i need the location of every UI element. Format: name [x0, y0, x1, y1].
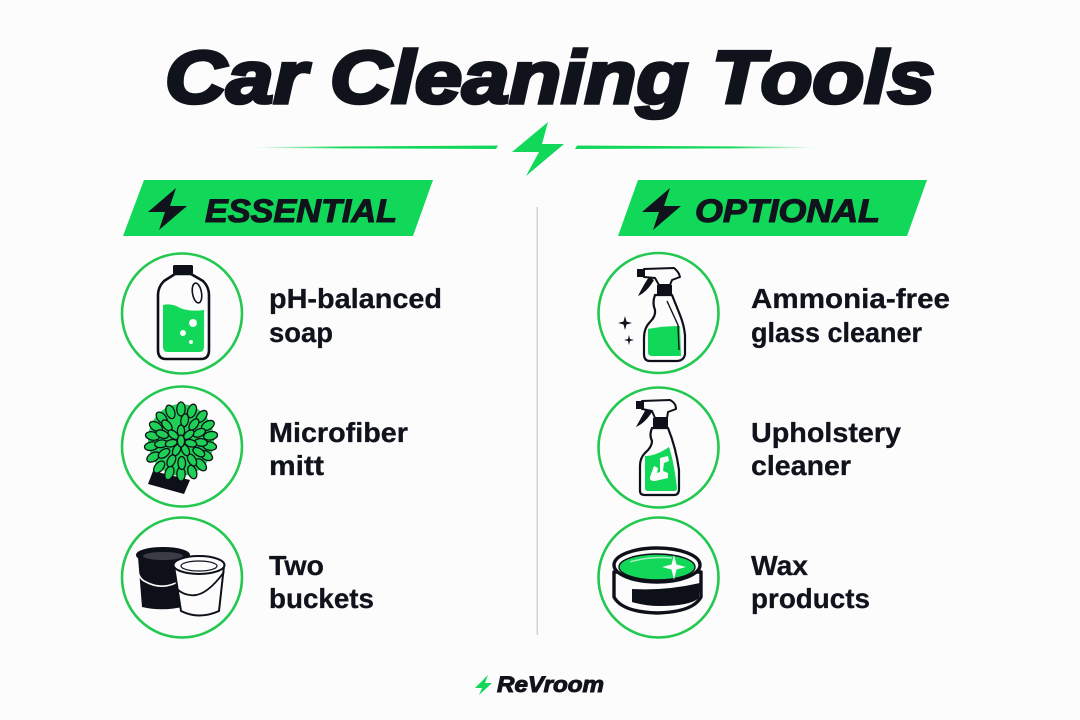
item: wax products — [598, 518, 870, 638]
item: two buckets — [122, 518, 374, 638]
item: microfiber mitt: mitt — [269, 450, 324, 481]
item: two buckets: buckets — [269, 583, 374, 614]
item: microfiber mitt: Microfiber — [269, 417, 408, 448]
item: pH-balanced soap — [122, 254, 442, 374]
essential heading badge — [123, 180, 433, 236]
item: ammonia-free glass cleaner — [598, 253, 950, 373]
item: wax products: products — [751, 583, 870, 614]
optional heading badge: OPTIONAL — [695, 193, 880, 229]
brand logo: ReVroom — [497, 672, 604, 697]
item: microfiber mitt — [122, 386, 408, 506]
item: pH-balanced soap: soap — [269, 317, 333, 348]
item: pH-balanced soap: pH-balanced — [269, 283, 442, 314]
title divider with bolt — [255, 122, 816, 176]
item: two buckets: Two — [269, 550, 324, 581]
title: Car Cleaning Tools — [165, 36, 935, 119]
panel: essential — [122, 180, 442, 638]
panel: optional — [598, 180, 950, 638]
item: upholstery cleaner — [598, 388, 901, 508]
item: upholstery cleaner: Upholstery — [751, 417, 901, 448]
item: wax products: Wax — [751, 550, 808, 581]
item: ammonia-free glass cleaner: Ammonia-free — [751, 283, 950, 314]
item: ammonia-free glass cleaner: glass cleaner — [751, 317, 922, 348]
vertical divider — [536, 207, 538, 635]
item: upholstery cleaner: cleaner — [751, 450, 851, 481]
optional heading badge — [618, 180, 927, 236]
essential heading badge: ESSENTIAL — [205, 193, 397, 229]
